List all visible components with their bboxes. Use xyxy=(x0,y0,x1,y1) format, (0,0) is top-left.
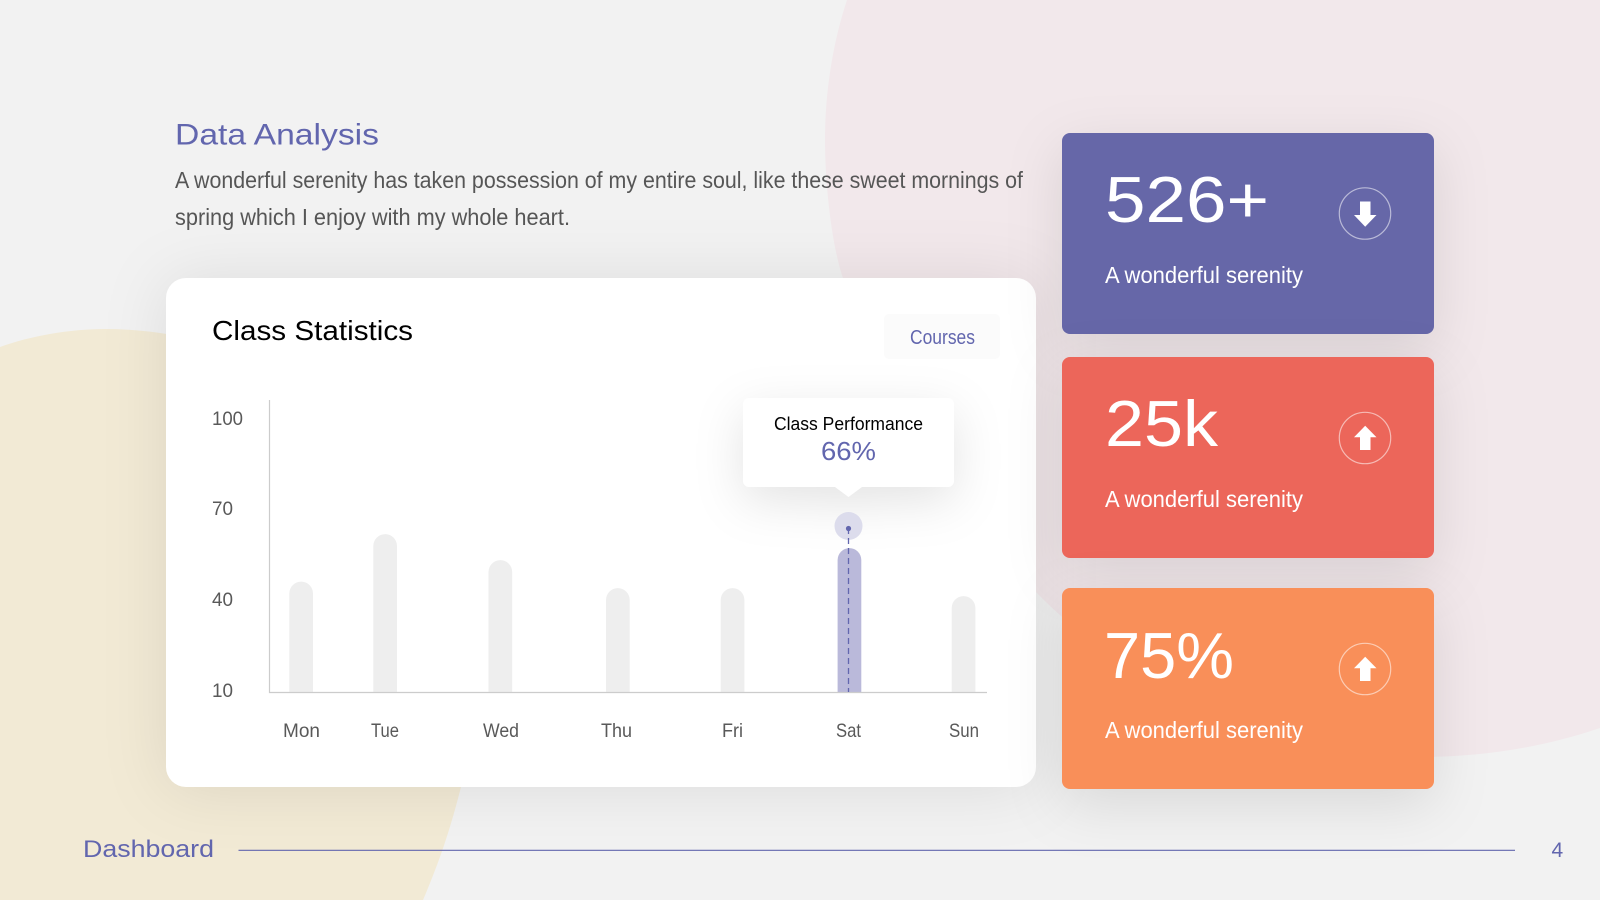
x axis labels xyxy=(283,720,979,742)
y axis labels: 10 xyxy=(212,680,233,702)
icon: up arrow xyxy=(1339,412,1391,464)
stat card: 526+: A wonderful serenity xyxy=(1105,262,1303,288)
stat card: 25k xyxy=(1062,357,1434,558)
stat card: 75%: A wonderful serenity xyxy=(1105,717,1303,743)
tooltip: class performance xyxy=(743,398,954,497)
x axis labels: Mon xyxy=(283,720,320,742)
bar chart xyxy=(212,400,987,742)
panel: class statistics xyxy=(166,278,1036,787)
stat card: 526+: 526+ xyxy=(1105,163,1269,236)
tooltip: class performance: Class Performance xyxy=(774,413,923,434)
footer label: Dashboard xyxy=(83,836,214,863)
pink background blob xyxy=(825,0,1600,757)
x axis labels: Thu xyxy=(601,720,632,742)
x axis labels: Tue xyxy=(371,720,399,742)
y axis labels: 70 xyxy=(212,498,233,520)
courses button xyxy=(884,314,1000,359)
highlighted bar: Sat xyxy=(838,548,861,692)
intro text xyxy=(175,167,1024,230)
x axis labels: Sun xyxy=(949,720,979,742)
bars xyxy=(289,534,975,692)
tooltip: class performance: 66% xyxy=(821,436,876,466)
intro text: A wonderful serenity has taken possession of my entire soul, like these sweet mornings of xyxy=(175,167,1024,193)
beige background blob xyxy=(0,329,480,900)
heading: Data Analysis: Data Analysis xyxy=(175,118,379,152)
stat card: 75%: 75% xyxy=(1104,619,1234,692)
x axis labels: Sat xyxy=(836,720,861,742)
stat card: 25k: A wonderful serenity xyxy=(1105,486,1303,512)
data point marker xyxy=(834,512,862,692)
icon: down arrow xyxy=(1339,188,1391,239)
stat card: 75% xyxy=(1062,588,1434,789)
intro text: spring which I enjoy with my whole heart. xyxy=(175,204,570,230)
axes xyxy=(270,400,987,692)
y axis labels xyxy=(212,408,243,702)
panel title: Class Statistics xyxy=(212,315,413,346)
stat card: 25k: 25k xyxy=(1105,387,1219,460)
page number: 4 xyxy=(1552,839,1564,862)
y axis labels: 40 xyxy=(212,589,233,611)
stat card: 526+ xyxy=(1062,133,1434,334)
x axis labels: Wed xyxy=(483,720,519,742)
icon: up arrow xyxy=(1339,643,1391,695)
panel background xyxy=(166,278,1036,787)
y axis labels: 100 xyxy=(212,408,243,430)
footer xyxy=(83,836,1564,863)
courses button: Courses xyxy=(910,327,975,349)
x axis labels: Fri xyxy=(722,720,743,742)
